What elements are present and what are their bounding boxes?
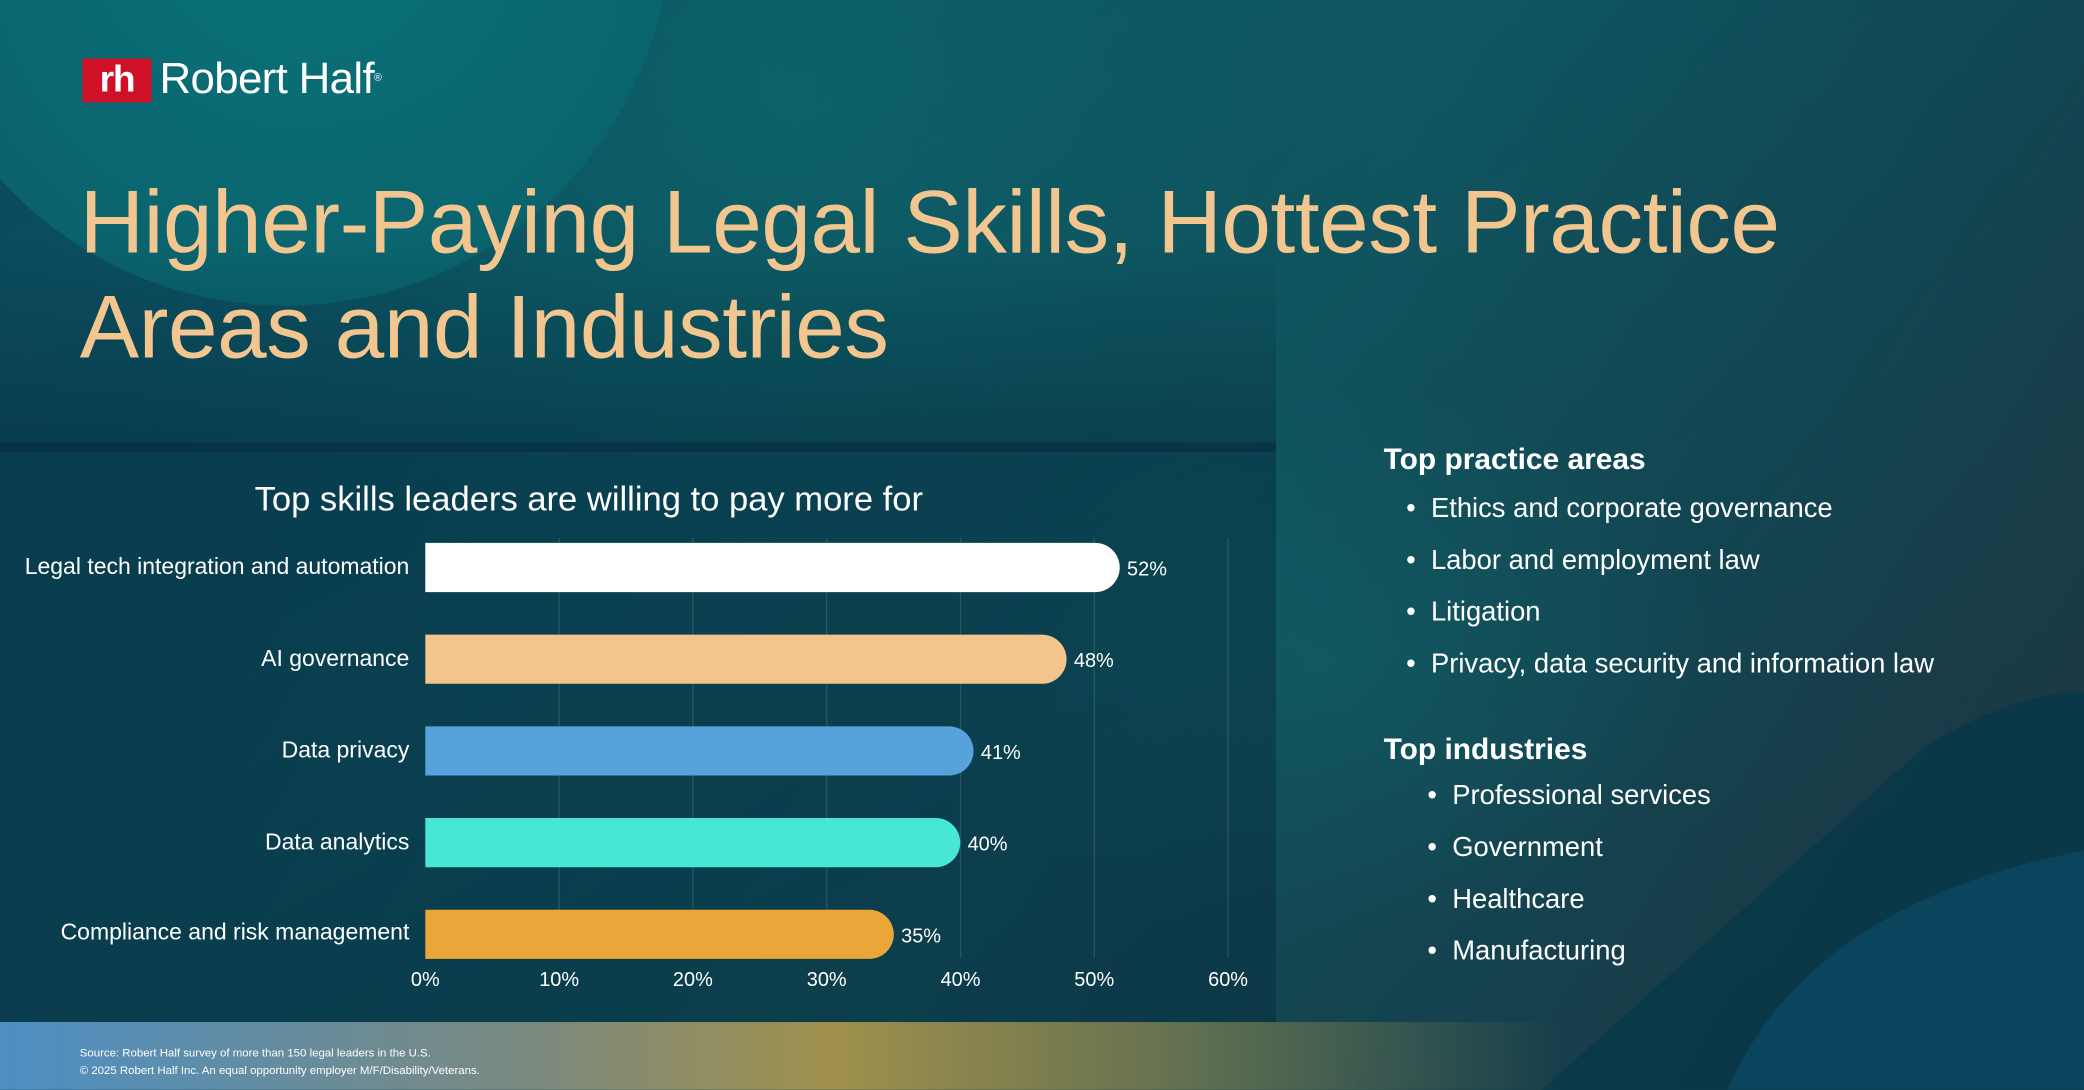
panel: top industries bbox=[1384, 732, 1711, 966]
title: Higher-Paying Legal Skills, Hottest Practice bbox=[80, 173, 1780, 272]
footer text: © 2025 Robert Half Inc. An equal opportunity employer M/F/Disability/Veterans. bbox=[80, 1063, 480, 1077]
axis: 30% bbox=[807, 969, 847, 991]
panel: top practice areas: Top practice areas bbox=[1384, 443, 1646, 476]
bar labels: Legal tech integration and automation bbox=[25, 553, 409, 579]
title bbox=[80, 173, 1780, 377]
logo: rh bbox=[100, 58, 134, 100]
bars bbox=[425, 543, 1120, 959]
footer text bbox=[80, 1046, 480, 1077]
panel: top practice areas: • Litigation bbox=[1406, 597, 1541, 627]
panel: top industries: • Manufacturing bbox=[1427, 936, 1626, 966]
bar labels: AI governance bbox=[261, 645, 409, 671]
value labels: 52% bbox=[1127, 558, 1167, 580]
value labels: 48% bbox=[1074, 650, 1114, 672]
footer strip bbox=[0, 1022, 2084, 1090]
panel: bar chart bbox=[0, 443, 1276, 1022]
axis bbox=[411, 969, 1248, 991]
axis: 0% bbox=[411, 969, 440, 991]
bar labels: Data analytics bbox=[265, 828, 409, 854]
bar labels bbox=[25, 553, 410, 945]
axis: 20% bbox=[673, 969, 713, 991]
logo: Robert Half® bbox=[159, 53, 381, 102]
bar labels: Compliance and risk management bbox=[61, 919, 410, 945]
axis: 50% bbox=[1074, 969, 1114, 991]
value labels bbox=[901, 558, 1167, 947]
panel: top industries: Top industries bbox=[1384, 732, 1587, 766]
bar labels: Data privacy bbox=[282, 737, 410, 763]
chart title: Top skills leaders are willing to pay more for bbox=[255, 478, 923, 518]
panel: top industries: • Government bbox=[1427, 832, 1603, 863]
value labels: 41% bbox=[981, 742, 1021, 764]
value labels: 35% bbox=[901, 925, 941, 947]
footer text: Source: Robert Half survey of more than 150 legal leaders in the U.S. bbox=[80, 1046, 431, 1059]
axis: 10% bbox=[539, 969, 579, 991]
title: Areas and Industries bbox=[80, 278, 889, 377]
value labels: 40% bbox=[968, 834, 1007, 856]
panel: top practice areas: • Labor and employment law bbox=[1406, 545, 1760, 575]
panel: top practice areas bbox=[1384, 443, 1934, 679]
panel: top industries: • Healthcare bbox=[1427, 884, 1585, 914]
panel: top practice areas: • Privacy, data security and information law bbox=[1406, 649, 1934, 679]
axis: 60% bbox=[1208, 969, 1248, 991]
panel: top industries: • Professional services bbox=[1427, 780, 1711, 811]
panel: top practice areas: • Ethics and corporate governance bbox=[1406, 493, 1833, 524]
axis: 40% bbox=[941, 969, 980, 991]
